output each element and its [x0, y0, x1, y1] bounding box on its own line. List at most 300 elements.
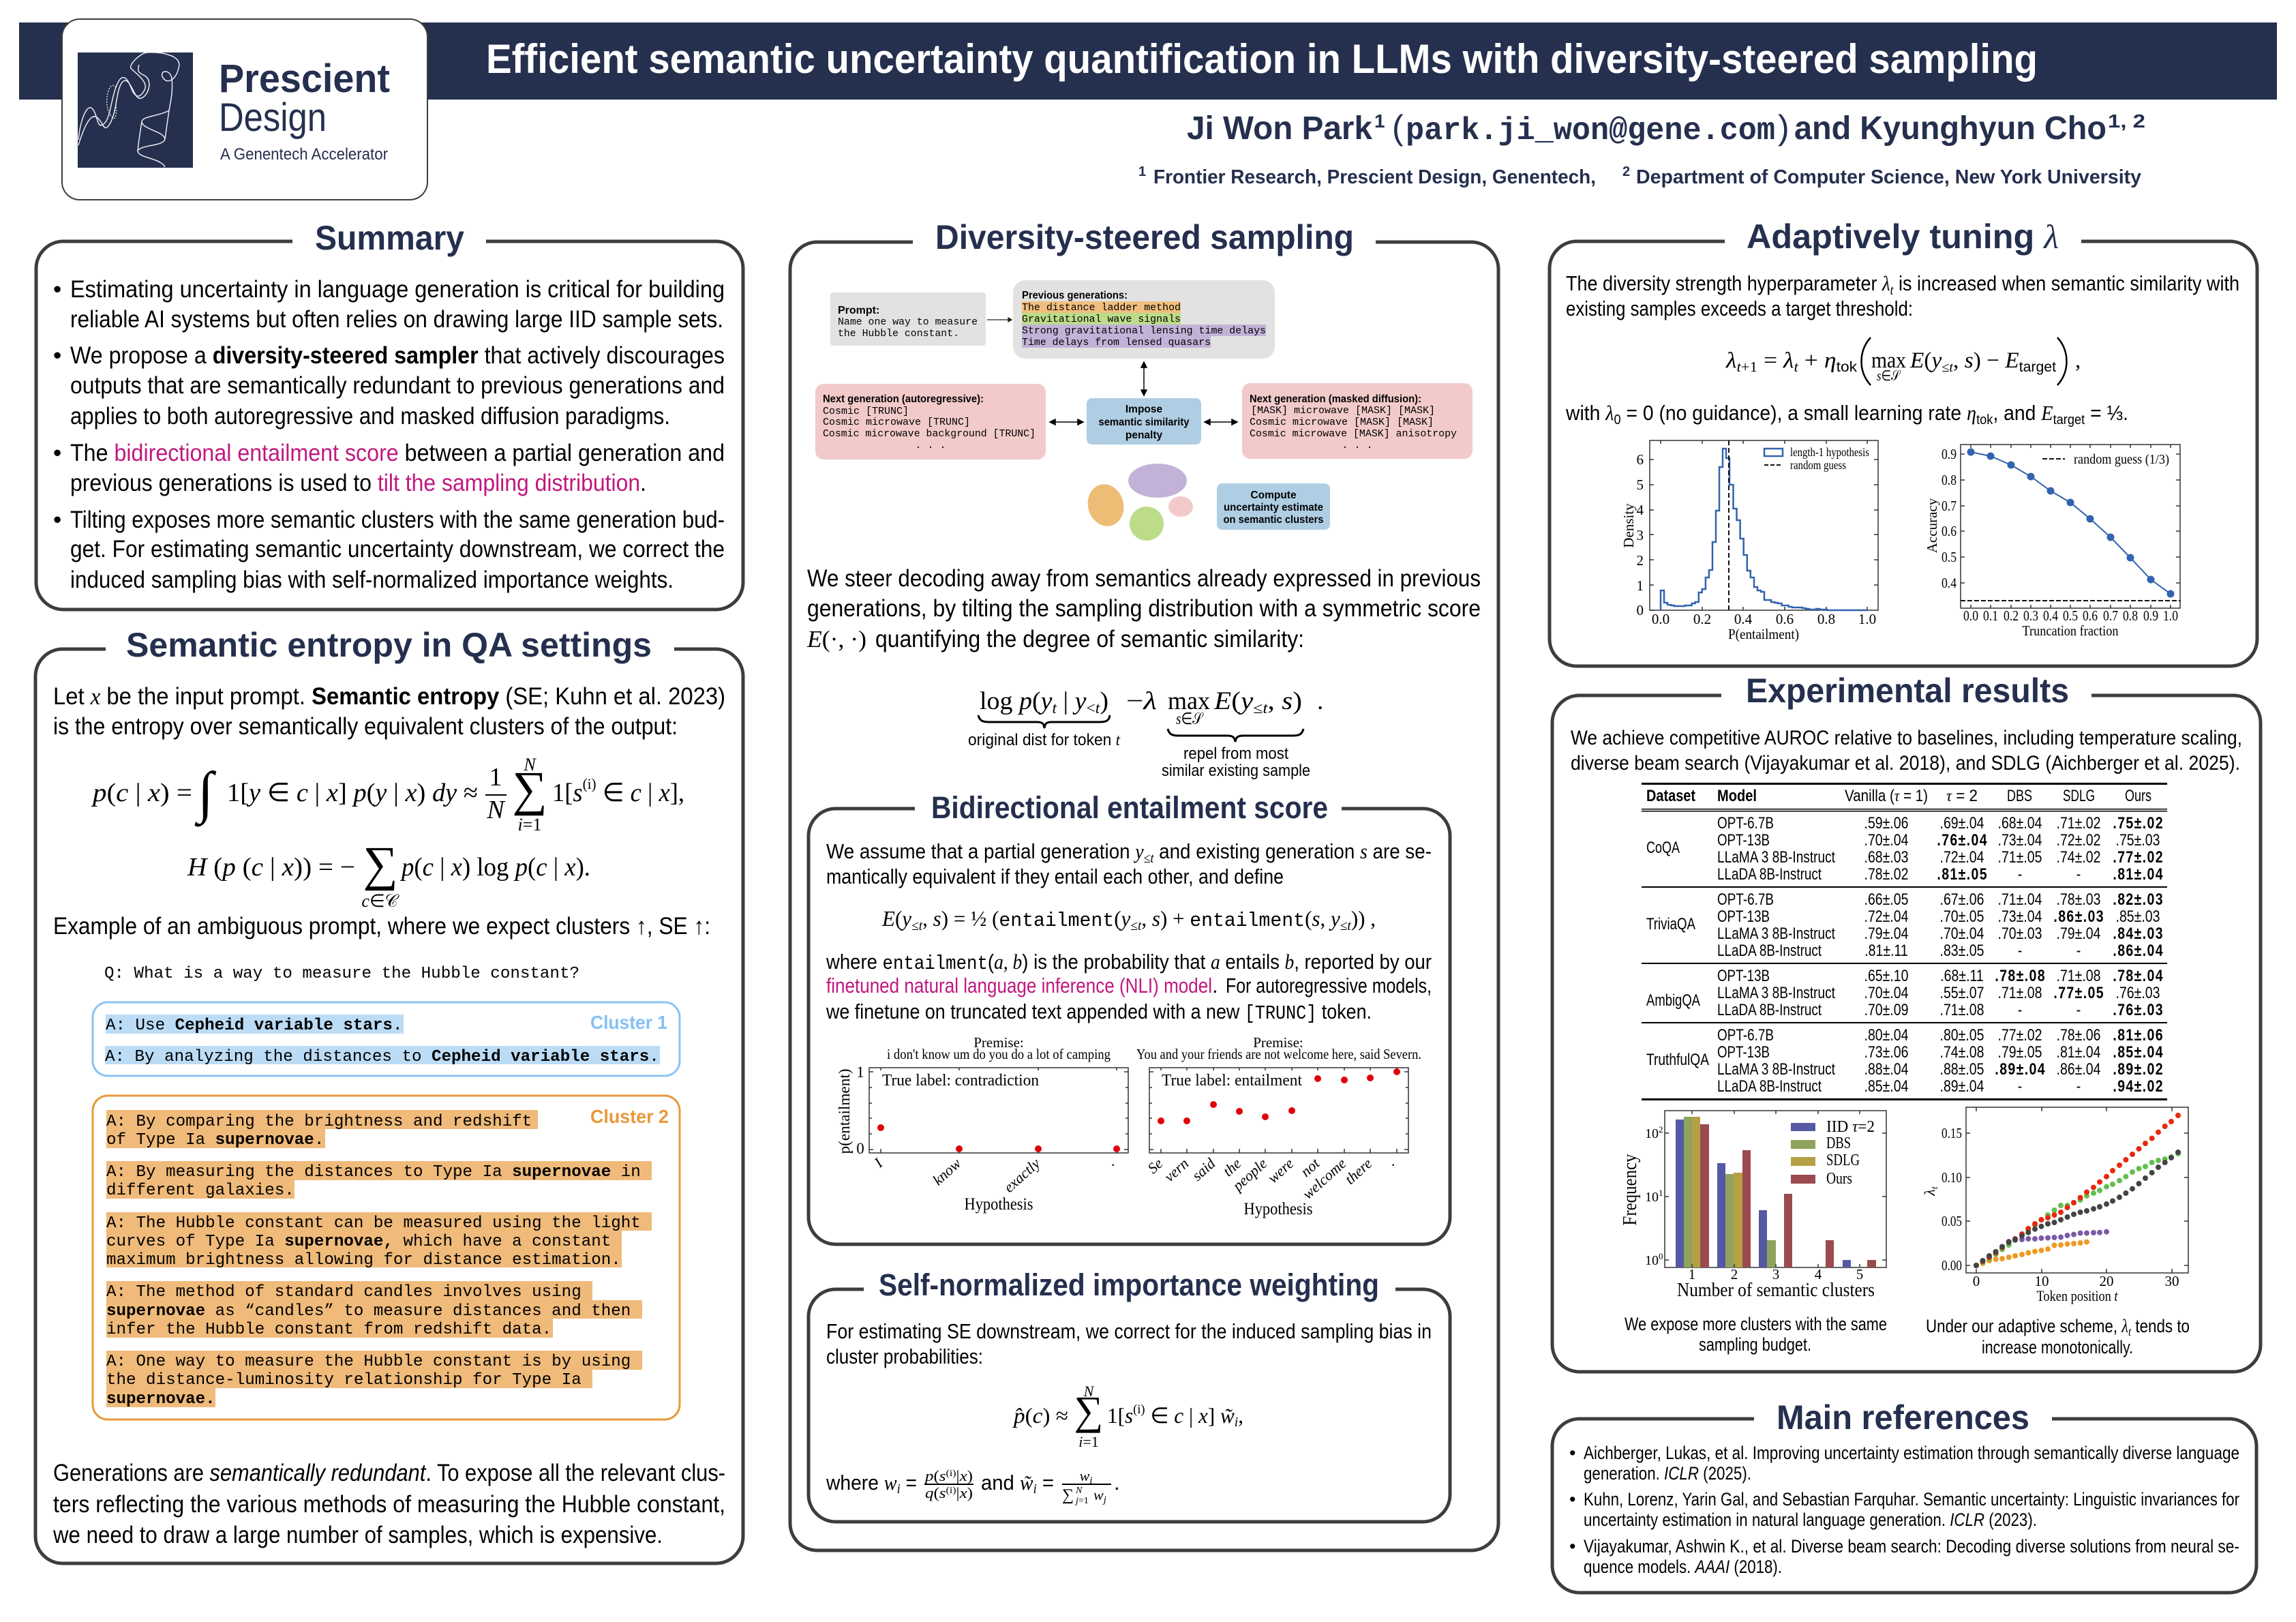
cluster 2: infer the Hubble constant from redshift data.: [106, 1321, 552, 1339]
chart: entailment histogram: 4: [1636, 502, 1644, 518]
reference list: uncertainty estimation in natural language generation. ICLR (2023).: [1584, 1510, 2037, 1530]
next generation autoregressive box: Cosmic microwave [TRUNC]: [823, 417, 970, 428]
entailment text: We assume that a partial generation y: [826, 839, 1165, 863]
equation: weights: ∑: [1062, 1486, 1074, 1504]
equation: weights: =: [1037, 1471, 1054, 1495]
ours column: .75±.02: [2113, 813, 2163, 832]
equation: tilted distribution: ): [1100, 687, 1108, 715]
equation: cluster estimate: [1012, 1383, 1243, 1450]
equation: cluster probability: N: [486, 796, 506, 824]
chart: contradiction example: exactly: [1000, 1154, 1044, 1196]
chart: lambda trajectories: [1921, 1107, 2190, 1357]
chart: entailment histogram: 5: [1636, 477, 1644, 493]
results table: [1642, 783, 2167, 1100]
temperature 2 column: .74±.08: [1940, 1042, 1984, 1061]
cluster 2: [93, 1096, 680, 1420]
SDLG column: .78±.06: [2057, 1025, 2100, 1044]
equation: tilted distribution: t: [1052, 700, 1057, 717]
equation: weights: p(s: [925, 1467, 945, 1484]
vanilla column: .81±.11: [1864, 941, 1908, 959]
table header: Model: [1717, 787, 1757, 805]
equation: tilted distribution: repel from most: [1183, 745, 1288, 763]
chart: semantic cluster counts: [1620, 1111, 1887, 1355]
steering text: E(·, ·): [806, 626, 866, 652]
steering text: We steer decoding away from semantics already expressed in previous: [807, 565, 1481, 592]
equation: weights: x): [960, 1467, 972, 1484]
ours column: .76±.03: [2113, 1000, 2163, 1019]
equation: bidirectional score: s) + entailment(s, y: [1152, 906, 1340, 932]
equation: cluster probability: p(c | x) =: [91, 779, 192, 807]
panel: diversity-steered sampling: [790, 218, 1498, 1550]
model column: LLaMA 3 8B-Instruct: [1717, 925, 1835, 943]
equation: bidirectional score: E(y: [882, 906, 911, 931]
chart: entailment histogram: 1: [1636, 577, 1644, 594]
model column: OPT-6.7B: [1717, 1026, 1774, 1045]
table header: [1646, 787, 2151, 805]
equation: tilted distribution: s∈𝒮: [1176, 710, 1204, 728]
temperature 2 column: .81±.05: [1937, 865, 1987, 883]
ours column: .77±.02: [2113, 847, 2163, 866]
series: red: [1976, 1115, 2178, 1265]
reference list: •: [1569, 1443, 1575, 1463]
chart: semantic cluster counts: 10: [1645, 1190, 1659, 1205]
cluster 2: A: By comparing the brightness and redshift: [106, 1113, 532, 1131]
DBS column: -: [2018, 1077, 2022, 1095]
temperature 2 column: .67±.06: [1940, 890, 1984, 908]
SDLG column: -: [2076, 941, 2081, 959]
intro text: is the entropy over semantically equivalent clusters of the output:: [53, 713, 678, 740]
chart: lambda trajectories: 20: [2100, 1273, 2113, 1289]
table header: SDLG: [2063, 787, 2095, 805]
table header: Vanilla (τ = 1): [1845, 787, 1928, 805]
temperature 2 column: .83±.05: [1940, 941, 1984, 959]
chart: truncation accuracy: 0.5: [2063, 607, 2078, 624]
caption: cluster counts: [1625, 1314, 1887, 1355]
learning rate text: target: [2053, 412, 2085, 427]
equation: weights: i: [1089, 1475, 1092, 1486]
next generation autoregressive box: Cosmic [TRUNC]: [823, 406, 909, 417]
caption: lambda trajectories: increase monotonically.: [1982, 1337, 2133, 1357]
chart: truncation accuracy: 0.4: [2043, 607, 2058, 624]
caption: lambda trajectories: [1926, 1316, 2190, 1357]
equation: weights: =: [901, 1471, 917, 1495]
table header: Dataset: [1646, 787, 1695, 805]
chart: truncation accuracy: Accuracy: [1924, 498, 1940, 553]
chart: entailment histogram: 6: [1636, 451, 1644, 468]
equation: entropy: p(c | x) log p(c | x).: [399, 853, 590, 882]
cluster 2: Cluster 2: [590, 1106, 669, 1127]
learning rate text: η: [1967, 401, 1976, 425]
equation: tilted distribution: similar existing sample: [1162, 762, 1310, 780]
cluster 2: supernovae as “candles” to measure distances and then: [106, 1302, 631, 1321]
chart: truncation accuracy: [1924, 445, 2180, 639]
example lead-in: Example of an ambiguous prompt, where we expect clusters ↑, SE ↑:: [53, 913, 710, 940]
equation: cluster estimate: ∈: [1145, 1403, 1169, 1428]
authors: [1187, 108, 2145, 149]
model column: OPT-6.7B: [1717, 890, 1774, 909]
heading: bidirectional entailment score: Bidirectional entailment score: [931, 790, 1328, 825]
temperature 2 column: .89±.04: [1940, 1077, 1984, 1095]
vanilla column: .65±.10: [1864, 966, 1908, 985]
chart: truncation accuracy: 0.8: [2123, 607, 2138, 624]
equation: cluster probability: N: [523, 755, 537, 775]
NLI text: where entailment(a, b) is the probability that a entails b, reported by our: [826, 950, 1432, 975]
ours column: .78±.04: [2113, 966, 2163, 985]
affiliations: 2: [1622, 164, 1630, 179]
authors: 1, 2: [2108, 110, 2145, 132]
summary bullets: Estimating uncertainty in language generation is critical for building: [70, 276, 725, 303]
heading: diversity-steered sampling: Diversity-steered sampling: [935, 218, 1354, 256]
equation: lambda update: s∈𝒮: [1877, 367, 1901, 384]
chart: contradiction example: [836, 1034, 1128, 1214]
equation: cluster probability: [91, 755, 684, 835]
equation: cluster estimate: 1[s: [1107, 1403, 1133, 1428]
ours column: .76±.03: [2116, 983, 2160, 1002]
equation: cluster probability: 1: [489, 763, 502, 792]
chart: entailment example: vern: [1161, 1155, 1192, 1185]
chart: truncation accuracy: 0.6: [2083, 607, 2098, 624]
equation: weights: w: [1093, 1486, 1104, 1503]
equation: weights: j=1: [1074, 1496, 1089, 1506]
authors: Ji Won Park: [1187, 110, 1372, 147]
logo wordmark: A Genentech Accelerator: [220, 145, 388, 164]
SDLG column: .77±.05: [2053, 983, 2104, 1002]
ours column: .89±.02: [2113, 1060, 2163, 1078]
equation: weights: |: [956, 1467, 960, 1484]
chart: semantic cluster counts: 3: [1772, 1266, 1779, 1282]
chart: entailment histogram: 0.8: [1817, 611, 1835, 627]
temperature 2 column: .69±.04: [1940, 813, 1984, 832]
equation: tilted distribution: [968, 687, 1323, 780]
heading: semantic entropy: Semantic entropy in QA settings: [126, 626, 652, 664]
chart: semantic cluster counts: Number of semantic clusters: [1677, 1280, 1875, 1301]
chart: truncation accuracy: 0.5: [1942, 549, 1957, 565]
chart: lambda trajectories: 0.05: [1942, 1213, 1962, 1229]
chart: entailment histogram: 3: [1636, 527, 1644, 543]
chart: truncation accuracy: 0.7: [1942, 498, 1957, 514]
table header: τ = 2: [1946, 787, 1978, 805]
equation: cluster probability: ∈: [596, 779, 624, 807]
vanilla column: .68±.03: [1864, 847, 1908, 866]
caption: lambda trajectories: Under our adaptive scheme, λ: [1926, 1316, 2157, 1336]
equation: entropy: ∑: [363, 837, 398, 891]
chart: entailment histogram: 1.0: [1858, 611, 1876, 627]
equation: cluster probability: c | x],: [631, 779, 685, 807]
penalty box: Impose: [1126, 404, 1163, 415]
SDLG column: -: [2076, 1077, 2081, 1095]
equation: lambda update: =: [1757, 348, 1783, 373]
cluster 2: A: One way to measure the Hubble constant is by using: [106, 1353, 631, 1371]
equation: weights: where w: [826, 1471, 898, 1495]
equation: entropy: H (p (c | x)) = −: [187, 853, 355, 882]
arrow: right box to penalty: [1205, 419, 1237, 425]
weighting text: [826, 1319, 1432, 1368]
panel: experimental results: [1552, 672, 2261, 1372]
equation: weights: [826, 1467, 1120, 1506]
summary bullets: induced sampling bias with self-normalized importance weights.: [70, 567, 674, 593]
equation: tilted distribution: log p(y: [980, 687, 1052, 715]
DBS column: .78±.08: [1995, 966, 2045, 985]
panel: bidirectional entailment score: [809, 790, 1450, 1244]
DBS column: .73±.04: [1998, 907, 2042, 925]
equation: lambda update: t: [1794, 359, 1799, 375]
equation: cluster probability: 1[s: [552, 779, 583, 807]
equation: cluster probability: 1[y ∈ c | x] p(y | x) dy ≈: [227, 779, 478, 807]
temperature 2 column: .70±.05: [1940, 907, 1984, 925]
equation: weights: i: [1033, 1482, 1037, 1497]
vanilla column: .88±.04: [1864, 1060, 1908, 1078]
NLI text: .: [1212, 974, 1218, 997]
equation: cluster estimate: i=1: [1078, 1433, 1099, 1450]
DBS column: -: [2018, 865, 2022, 883]
heading: main references: Main references: [1777, 1398, 2029, 1437]
arrow: prompt to previous: [987, 318, 1012, 322]
closing text: ters reflecting the various methods of measuring the Hubble constant,: [53, 1491, 725, 1518]
vanilla column: .79±.04: [1864, 924, 1908, 942]
chart: contradiction example: p(entailment): [836, 1069, 853, 1154]
equation: lambda update: target: [2019, 359, 2056, 375]
equation: cluster probability: i=1: [518, 815, 541, 835]
vanilla column: .85±.04: [1864, 1077, 1908, 1095]
DBS column: .70±.03: [1998, 924, 2042, 942]
summary bullets: get. For estimating semantic uncertainty downstream, we correct the: [70, 536, 725, 562]
dataset column: TriviaQA: [1646, 915, 1695, 933]
chart: contradiction example: .: [1111, 1152, 1115, 1169]
chart: lambda trajectories: Token position t: [2037, 1287, 2118, 1304]
arrow: previous to penalty: [1141, 362, 1147, 395]
chart: entailment example: not: [1297, 1154, 1323, 1180]
SDLG column: .72±.02: [2057, 830, 2100, 849]
equation: lambda update: s) − E: [1965, 348, 2019, 373]
prompt box: [830, 292, 986, 346]
uncertainty estimate box: [1217, 483, 1330, 530]
semantic clusters: [1083, 464, 1193, 541]
chart: semantic cluster counts: 10: [1645, 1253, 1659, 1268]
chart: lambda trajectories: λ: [1921, 1189, 1938, 1196]
ours column: .82±.03: [2113, 890, 2163, 908]
equation: cluster estimate: c | x] w̃: [1175, 1403, 1235, 1428]
ours column: .85±.03: [2116, 907, 2160, 925]
chart: entailment example: there: [1342, 1154, 1376, 1188]
intro text: [53, 683, 725, 740]
logo wordmark: Prescient: [219, 57, 390, 101]
summary bullets: •: [53, 342, 61, 369]
reference list: [1569, 1443, 2239, 1577]
legend: Ours: [1826, 1170, 1852, 1188]
ours column: .81±.06: [2113, 1025, 2163, 1044]
equation: tilted distribution: t: [1263, 700, 1268, 717]
series: dark: [1976, 1152, 2178, 1265]
equation: weights: j: [1102, 1495, 1106, 1505]
temperature 2 column: .70±.04: [1940, 924, 1984, 942]
tuning text: is increased when semantic similarity with: [1894, 271, 2239, 295]
equation: cluster estimate: ∑: [1074, 1388, 1103, 1433]
DBS column: .77±.02: [1998, 1025, 2042, 1044]
vanilla column: [1864, 813, 1908, 1095]
series: purple: [1976, 1232, 2106, 1265]
authors: ): [1778, 108, 1789, 147]
equation: tilted distribution: ,: [1268, 687, 1282, 715]
cluster 1: Cluster 1: [590, 1012, 667, 1033]
intro text: Let x be the input prompt. Semantic entropy (SE; Kuhn et al. 2023): [53, 683, 725, 710]
equation: tilted distribution: max: [1168, 687, 1210, 715]
summary bullets: previous generations is used to tilt the sampling distribution.: [70, 470, 646, 496]
chart: entailment histogram: length-1 hypothesis: [1790, 445, 1869, 459]
header banner: [19, 22, 2277, 100]
cluster 2: of Type Ia supernovae.: [106, 1131, 324, 1150]
affiliations: Department of Computer Science, New York University: [1636, 166, 2141, 188]
chart: semantic cluster counts: 2: [1659, 1124, 1663, 1135]
equation: bidirectional score: ≤t: [1340, 918, 1351, 933]
chart: semantic cluster counts: 1: [1659, 1188, 1663, 1198]
equation: weights: x): [960, 1484, 972, 1501]
NLI text: For autoregressive models,: [1226, 974, 1432, 997]
summary bullets: outputs that are semantically redundant to previous generations and: [70, 372, 725, 399]
chart: entailment example: said: [1188, 1154, 1219, 1184]
chart: contradiction example: True label: contradiction: [882, 1072, 1039, 1090]
NLI text: we finetune on truncated text appended with a new [TRUNC] token.: [826, 1000, 1372, 1025]
authors: (: [1392, 108, 1404, 147]
cluster 1: A: By analyzing the distances to Cepheid variable stars.: [105, 1048, 659, 1066]
steering text: generations, by tilting the sampling distribution with a symmetric score: [807, 595, 1481, 622]
chart: entailment histogram: 0.4: [1734, 611, 1753, 627]
diagram: sampling overview: [815, 280, 1472, 541]
equation: lambda update: ≤t: [1942, 360, 1953, 375]
DBS column: .68±.04: [1998, 813, 2042, 832]
SDLG column: .74±.02: [2057, 847, 2100, 866]
next generation autoregressive box: Cosmic microwave background [TRUNC]: [823, 428, 1036, 440]
authors: park.ji_won@gene.com: [1406, 113, 1775, 149]
chart: semantic cluster counts: 0: [1659, 1251, 1663, 1261]
closing text: we need to draw a large number of samples, which is expensive.: [52, 1522, 663, 1548]
chart: entailment example: You and your friends are not welcome here, said Severn.: [1136, 1046, 1421, 1062]
equation: lambda update: λ: [1726, 348, 1736, 373]
vanilla column: .78±.02: [1864, 865, 1908, 883]
SDLG column: -: [2076, 1000, 2081, 1019]
model column: LLaDA 8B-Instruct: [1717, 1077, 1822, 1096]
prompt box: the Hubble constant.: [838, 328, 959, 340]
SDLG column: .79±.04: [2057, 924, 2100, 942]
chart: contradiction example: know: [929, 1154, 965, 1188]
model column: OPT-13B: [1717, 1043, 1770, 1062]
summary bullets: •: [53, 440, 61, 466]
dataset column: AmbigQA: [1646, 991, 1700, 1010]
cluster 1: A: Use Cepheid variable stars.: [106, 1017, 402, 1035]
ours column: .86±.04: [2113, 941, 2163, 959]
model column: [1717, 814, 1835, 1096]
equation: weights: (i): [946, 1469, 956, 1479]
equation: lambda update: tok: [1837, 359, 1858, 375]
DBS column: -: [2018, 1000, 2022, 1019]
equation: weights: (i): [946, 1486, 956, 1496]
chart: truncation accuracy: 0.2: [2004, 607, 2019, 624]
penalty box: [1087, 398, 1201, 445]
equation: cluster probability: ∑: [512, 762, 547, 816]
previous generations box: Time delays from lensed quasars: [1022, 337, 1211, 348]
next generation masked diffusion box: [MASK] microwave [MASK] [MASK]: [1251, 405, 1435, 417]
authors: and Kyunghyun Cho: [1794, 110, 2106, 147]
chart: semantic cluster counts: 4: [1815, 1266, 1822, 1282]
equation: lambda update: η: [1824, 348, 1835, 373]
learning rate text: , and: [1993, 401, 2041, 425]
SDLG column: .86±.04: [2057, 1060, 2100, 1078]
chart: entailment histogram: [1620, 440, 1878, 642]
legend: [1791, 1118, 1875, 1188]
chart: truncation accuracy: 0.9: [2143, 607, 2158, 624]
equation: tilted distribution: −λ: [1126, 687, 1157, 715]
learning rate text: = ⅓.: [2085, 401, 2128, 425]
model column: OPT-13B: [1717, 907, 1770, 926]
learning rate text: 0: [1614, 412, 1621, 427]
authors: 1: [1374, 110, 1385, 132]
cluster 2: A: The method of standard candles involves using: [106, 1283, 581, 1302]
equation: tilted distribution: original dist for token t: [968, 731, 1121, 749]
caption: lambda trajectories: tends to: [2131, 1316, 2190, 1336]
equation: lambda update: [1725, 337, 2081, 385]
caption: cluster counts: sampling budget.: [1699, 1334, 1811, 1355]
DBS column: .89±.04: [1995, 1060, 2045, 1078]
equation: weights: .: [1114, 1471, 1120, 1495]
learning rate text: with λ: [1566, 401, 1615, 425]
equation: tilted distribution: y: [1075, 687, 1086, 715]
chart: truncation accuracy: random guess (1/3): [2074, 452, 2169, 467]
logo wordmark: Design: [219, 95, 327, 140]
chart: truncation accuracy: 0.9: [1942, 446, 1957, 462]
weighting text: For estimating SE downstream, we correct for the induced sampling bias in: [826, 1319, 1432, 1343]
chart: lambda trajectories: 0.10: [1942, 1169, 1962, 1186]
summary bullets: reliable AI systems but often relies on drawing large IID sample sets.: [70, 306, 723, 333]
SDLG column: -: [2076, 865, 2081, 883]
model column: OPT-13B: [1717, 967, 1770, 985]
steering text: quantifying the degree of semantic similarity:: [875, 626, 1304, 652]
dataset column: CoQA: [1646, 839, 1680, 857]
cluster 2: maximum brightness allowing for distance estimation.: [106, 1251, 621, 1270]
DBS column: .71±.08: [1998, 983, 2042, 1002]
previous generations box: Gravitational wave signals: [1022, 314, 1181, 325]
chart: entailment histogram: 0: [1636, 602, 1644, 618]
previous generations box: Strong gravitational lensing time delays: [1022, 325, 1266, 337]
equation: tilted distribution: ≤: [1253, 700, 1263, 717]
heading: experimental results: Experimental results: [1746, 672, 2069, 710]
model column: LLaMA 3 8B-Instruct: [1717, 984, 1835, 1002]
dataset column: [1646, 839, 1709, 1069]
vanilla column: .70±.04: [1864, 983, 1908, 1002]
model column: LLaMA 3 8B-Instruct: [1717, 1060, 1835, 1079]
title: Efficient semantic uncertainty quantification in LLMs with diversity-steered sampling: [486, 36, 2038, 82]
temperature 2 column: .71±.08: [1940, 1000, 1984, 1019]
ours column: .94±.02: [2113, 1077, 2163, 1095]
equation: weights: i: [897, 1482, 901, 1497]
next generation masked diffusion box: Cosmic microwave [MASK] anisotropy: [1250, 428, 1457, 440]
chart: lambda trajectories: 30: [2165, 1273, 2179, 1289]
panel: main references: [1552, 1398, 2256, 1593]
equation: bidirectional score: )) ,: [1351, 906, 1376, 931]
equation: tilted distribution: .: [1317, 687, 1323, 715]
equation: bidirectional score: ,: [922, 906, 933, 931]
equation: tilted distribution: s): [1282, 687, 1301, 715]
chart: contradiction example: i don't know um do you do a lot of camping: [887, 1046, 1111, 1062]
equation: lambda update: max: [1871, 348, 1906, 373]
DBS column: .71±.04: [1998, 890, 2042, 908]
temperature 2 column: .72±.04: [1940, 847, 1984, 866]
summary bullets: applies to both autoregressive and masked diffusion paradigms.: [70, 403, 670, 430]
vanilla column: .66±.05: [1864, 890, 1908, 908]
tuning text: t: [1890, 283, 1894, 298]
next generation masked diffusion box: [1242, 383, 1472, 459]
cluster 2: the distance-luminosity relationship for Type Ia: [106, 1371, 581, 1390]
uncertainty estimate box: Compute: [1250, 490, 1297, 501]
chart: contradiction example: 1: [856, 1064, 864, 1081]
